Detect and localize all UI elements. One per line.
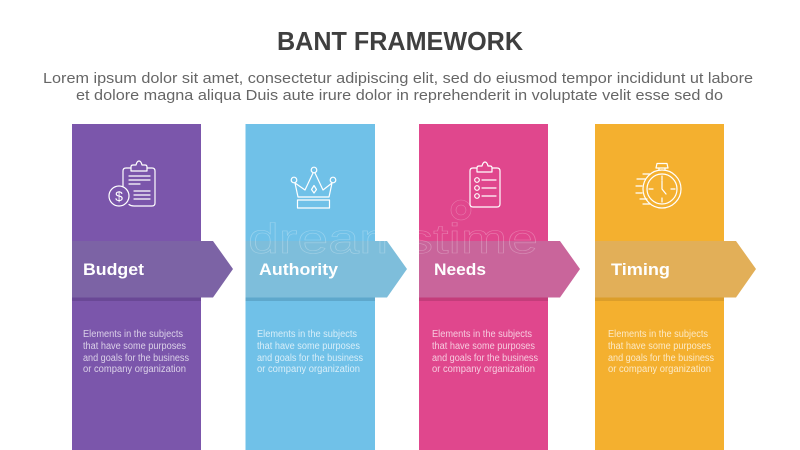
column: Authority: [246, 124, 375, 450]
heading: Budget: Budget: [83, 260, 144, 279]
icon: clipboard with dollar coin: $: [115, 188, 123, 204]
body text: Needs: and goals for the business: [432, 353, 538, 364]
panel: Needs: [419, 124, 580, 450]
arrow shadow: Authority: [246, 297, 375, 301]
subtitle text block: [43, 70, 753, 104]
body text: Timing: or company organization: [608, 364, 711, 375]
icon: clipboard with dollar coin: [109, 161, 155, 206]
column: Budget: [72, 124, 201, 450]
body text: Timing: and goals for the business: [608, 353, 714, 364]
watermark: dreamstime: [248, 215, 538, 262]
watermark: [248, 200, 538, 262]
panel: Timing: [595, 124, 756, 450]
subtitle text block: Lorem ipsum dolor sit amet, consectetur adipiscing elit, sed do eiusmod tempor incididunt ut labore: [43, 70, 753, 87]
body text: Authority: Elements in the subjects: [257, 329, 357, 340]
icon: checklist clipboard: [470, 162, 500, 207]
column: Timing: [595, 124, 724, 450]
body text: Timing: Elements in the subjects: [608, 329, 708, 340]
body text: Budget: or company organization: [83, 364, 186, 375]
body text: Budget: that have some purposes: [83, 341, 186, 352]
icon: crown: [291, 167, 336, 208]
arrow shadow: Budget: [72, 297, 201, 301]
body text: Authority: and goals for the business: [257, 353, 363, 364]
body text: Authority: or company organization: [257, 364, 360, 375]
title: BANT FRAMEWORK: [277, 26, 523, 56]
body text: Needs: [432, 329, 538, 375]
body text: Authority: that have some purposes: [257, 341, 360, 352]
arrow: Authority: [246, 241, 407, 298]
heading: Authority: Authority: [259, 260, 339, 279]
arrow: Budget: [72, 241, 233, 298]
body text: Needs: Elements in the subjects: [432, 329, 532, 340]
arrow shadow: Needs: [419, 297, 548, 301]
body text: Needs: that have some purposes: [432, 341, 535, 352]
panel: Authority: [246, 124, 407, 450]
heading: Timing: Timing: [611, 260, 670, 279]
body text: Needs: or company organization: [432, 364, 535, 375]
body text: Timing: that have some purposes: [608, 341, 711, 352]
body text: Budget: Elements in the subjects: [83, 329, 183, 340]
body text: Timing: [608, 329, 714, 375]
body text: Authority: [257, 329, 363, 375]
arrow shadow: Timing: [595, 297, 724, 301]
arrow: Needs: [419, 241, 580, 298]
icon: stopwatch: [636, 164, 681, 208]
column: Needs: [419, 124, 548, 450]
arrow: Timing: [595, 241, 756, 298]
subtitle text block: et dolore magna aliqua Duis aute irure dolor in reprehenderit in voluptate velit esse sed do: [76, 87, 723, 104]
panel: Budget: [72, 124, 233, 450]
body text: Budget: and goals for the business: [83, 353, 189, 364]
body text: Budget: [83, 329, 189, 375]
heading: Needs: Needs: [434, 260, 486, 279]
